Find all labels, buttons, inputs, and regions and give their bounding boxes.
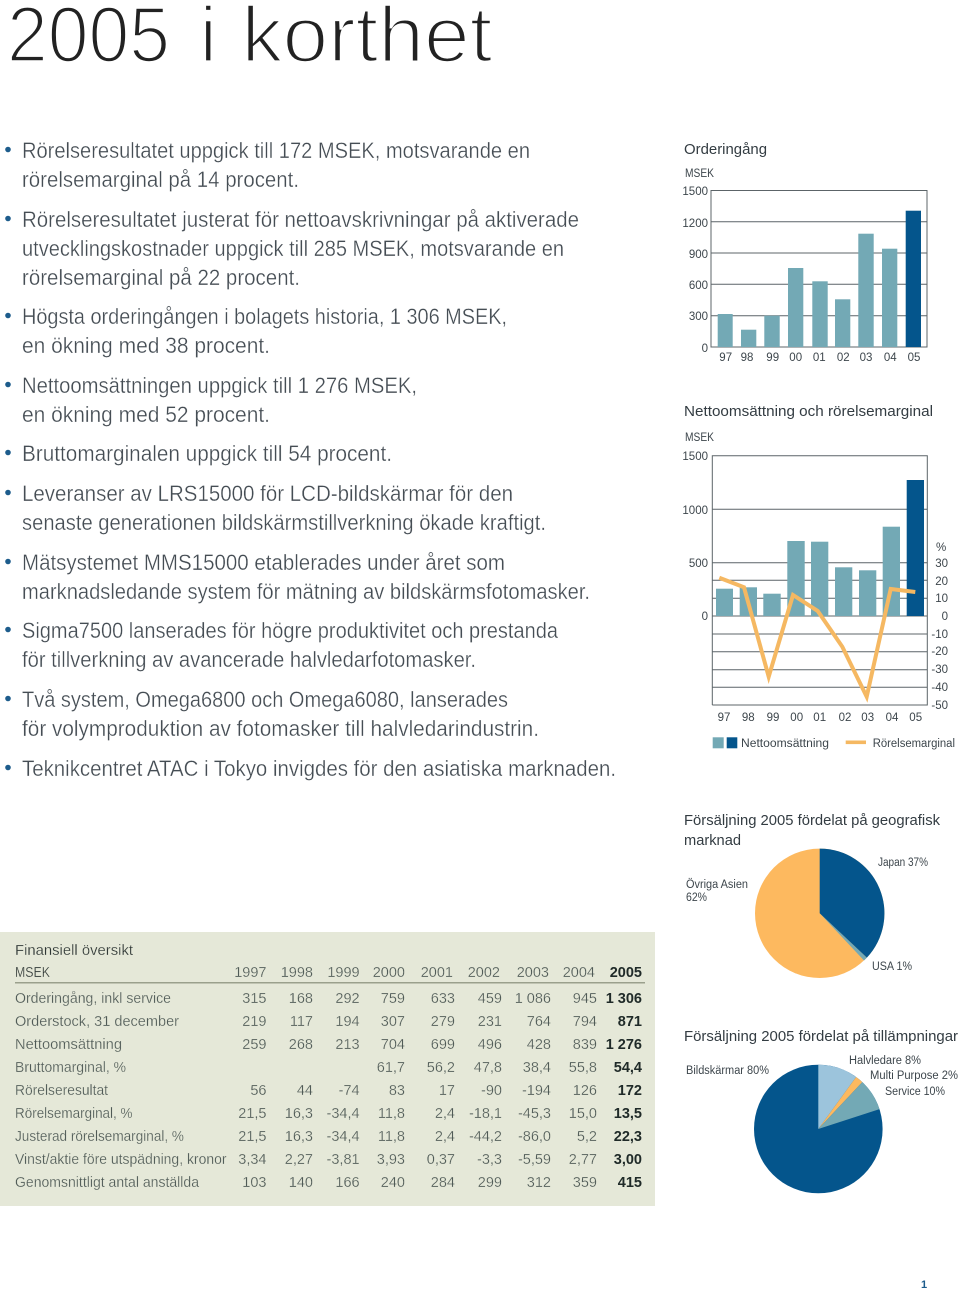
panel: Nettoomsättning och rörelsemarginal chart: -20 <box>931 646 948 658</box>
row: Orderstock: 279 <box>431 1014 455 1030</box>
row: Rörelseresultat: 17 <box>439 1083 455 1099</box>
row: Justerad rörelsemarginal: 11,8 <box>378 1129 405 1145</box>
panel: Orderingång bar chart: 900 <box>689 249 708 261</box>
bullet list: highlights: Teknikcentret ATAC i Tokyo invigdes för den asiatiska marknaden. <box>22 756 616 781</box>
row: Rörelseresultat: 83 <box>389 1083 405 1099</box>
panel: Orderingång bar chart: 300 <box>689 311 708 323</box>
bullet list: highlights: Högsta orderingången i bolagets historia, 1 306 MSEK, <box>22 304 507 329</box>
panel: Orderingång bar chart: 600 <box>689 280 708 292</box>
panel: pie chart geografisk marknad: marknad <box>684 833 741 849</box>
panel: pie chart geografisk marknad: 62% <box>686 892 707 904</box>
row: Justerad rörelsemarginal: Justerad rörelsemarginal, % <box>15 1128 184 1145</box>
panel: pie chart tillämpningar <box>684 1029 958 1193</box>
row: Orderingång: 633 <box>431 991 455 1007</box>
heading: Orderingång: Orderingång <box>684 142 767 158</box>
row: Orderstock: 219 <box>242 1014 266 1030</box>
row: Genomsnittligt antal anställda: 140 <box>289 1175 313 1191</box>
row: Orderstock: 307 <box>381 1014 405 1030</box>
row: Rörelsemarginal: 15,0 <box>569 1106 597 1122</box>
row: Justerad rörelsemarginal: -34,4 <box>327 1129 360 1145</box>
row: Vinst/aktie: 3,93 <box>377 1152 405 1168</box>
row: Rörelseresultat: -90 <box>481 1083 502 1099</box>
row: Orderingång: Orderingång, inkl service <box>15 990 171 1007</box>
row: Nettoomsättning: 1 276 <box>606 1037 642 1053</box>
panel: Nettoomsättning och rörelsemarginal chart: -10 <box>931 629 948 641</box>
legend: Nettoomsättning <box>741 738 829 750</box>
row: Rörelsemarginal: -34,4 <box>327 1106 360 1122</box>
panel: pie chart geografisk marknad: USA 1% <box>872 961 912 973</box>
row: Rörelseresultat: 44 <box>297 1083 313 1099</box>
row: Rörelsemarginal: 16,3 <box>285 1106 313 1122</box>
row: Vinst/aktie: 2,27 <box>285 1152 313 1168</box>
panel: Nettoomsättning och rörelsemarginal chart: 30 <box>935 558 948 570</box>
panel: Nettoomsättning och rörelsemarginal chart: 98 <box>742 712 755 724</box>
panel: Nettoomsättning och rörelsemarginal chart: -30 <box>931 664 948 676</box>
row: Genomsnittligt antal anställda: 359 <box>573 1175 597 1191</box>
panel: Nettoomsättning och rörelsemarginal chart: 97 <box>718 712 730 724</box>
heading: geografisk marknad: Försäljning 2005 fördelat på geografisk <box>684 813 941 829</box>
title <box>7 0 493 78</box>
bullet list: highlights: Leveranser av LRS15000 för LCD-bildskärmar för den <box>22 481 513 506</box>
row: Nettoomsättning: Nettoomsättning <box>15 1036 122 1053</box>
panel: Nettoomsättning och rörelsemarginal chart: 99 <box>767 712 779 724</box>
bullet list: highlights: Sigma7500 lanserades för högre produktivitet och prestanda <box>22 618 559 643</box>
row: Justerad rörelsemarginal: 21,5 <box>238 1129 266 1145</box>
table header row: 1999 <box>327 965 360 981</box>
row: Vinst/aktie: 0,37 <box>427 1152 455 1168</box>
panel: Orderingång bar chart: 97 <box>719 352 732 364</box>
panel: pie chart tillämpningar: Bildskärmar 80% <box>686 1065 769 1077</box>
panel: Nettoomsättning och rörelsemarginal chart: 1000 <box>682 505 708 517</box>
row: Justerad rörelsemarginal: -86,0 <box>518 1129 551 1145</box>
row: Nettoomsättning <box>15 1036 642 1053</box>
panel: Orderingång bar chart: MSEK <box>685 168 714 180</box>
panel: Nettoomsättning och rörelsemarginal chart: MSEK <box>685 432 714 444</box>
row: Vinst/aktie: 2,77 <box>569 1152 597 1168</box>
row: Orderstock: Orderstock, 31 december <box>15 1013 179 1030</box>
row: Orderingång <box>15 990 642 1007</box>
row: Genomsnittligt antal anställda: 240 <box>381 1175 405 1191</box>
row: Rörelseresultat: 172 <box>618 1083 642 1099</box>
panel: Orderingång bar chart: 02 <box>837 352 850 364</box>
row: Bruttomarginal: 54,4 <box>614 1060 642 1076</box>
row: Rörelsemarginal: 2,4 <box>435 1106 455 1122</box>
row: Orderingång: 459 <box>478 991 502 1007</box>
row: Rörelsemarginal: 21,5 <box>238 1106 266 1122</box>
bullet list: highlights: Två system, Omega6800 och Omega6080, lanserades <box>22 687 508 712</box>
row: Orderingång: 292 <box>335 991 360 1007</box>
row: Vinst/aktie: 3,34 <box>238 1152 266 1168</box>
bullet list: highlights: Rörelseresultatet uppgick till 172 MSEK, motsvarande en <box>22 138 530 163</box>
bullet list: highlights: marknadsledande system för mätning av bildskärmsfotomasker. <box>22 579 590 604</box>
legend <box>713 737 955 750</box>
panel: Nettoomsättning och rörelsemarginal chart: 01 <box>813 712 826 724</box>
row: Rörelseresultat: 126 <box>573 1083 597 1099</box>
row: Justerad rörelsemarginal: 2,4 <box>435 1129 455 1145</box>
row: Nettoomsättning: 428 <box>527 1037 551 1053</box>
row: Justerad rörelsemarginal <box>15 1128 642 1145</box>
row: Rörelseresultat: -194 <box>522 1083 551 1099</box>
row: Nettoomsättning: 259 <box>242 1037 266 1053</box>
row: Orderstock: 194 <box>335 1014 360 1030</box>
row: Nettoomsättning: 496 <box>478 1037 502 1053</box>
row: Rörelsemarginal <box>15 1105 642 1122</box>
bullet list: highlights: rörelsemarginal på 14 procent. <box>22 167 299 192</box>
row: Nettoomsättning: 268 <box>289 1037 313 1053</box>
row: Nettoomsättning: 839 <box>573 1037 597 1053</box>
panel: Nettoomsättning och rörelsemarginal chart: 0 <box>942 611 948 623</box>
panel: Orderingång bar chart: 05 <box>908 352 920 364</box>
bullet list: highlights: utvecklingskostnader uppgick till 285 MSEK, motsvarande en <box>22 236 564 261</box>
bullet list: highlights: rörelsemarginal på 22 procent. <box>22 265 300 290</box>
panel: pie chart geografisk marknad: Övriga Asien <box>686 879 748 891</box>
row: Justerad rörelsemarginal: 5,2 <box>577 1129 597 1145</box>
row: Justerad rörelsemarginal: 16,3 <box>285 1129 313 1145</box>
bullet list: highlights: Mätsystemet MMS15000 etablerades under året som <box>22 550 505 575</box>
row: Orderingång: 168 <box>289 991 313 1007</box>
row: Orderingång: 1 086 <box>515 991 551 1007</box>
row: Rörelsemarginal: 11,8 <box>378 1106 405 1122</box>
panel: pie chart geografisk marknad: Japan 37% <box>878 857 928 869</box>
row: Rörelsemarginal: -18,1 <box>469 1106 502 1122</box>
panel: pie chart tillämpningar: Halvledare 8% <box>849 1055 921 1067</box>
row: Genomsnittligt antal anställda: 284 <box>431 1175 455 1191</box>
table header row: 2000 <box>373 965 405 981</box>
row: Nettoomsättning: 704 <box>381 1037 405 1053</box>
panel: pie chart geografisk marknad <box>684 813 941 978</box>
table header row: 2001 <box>421 965 453 981</box>
table header row: 1997 <box>234 965 266 981</box>
row: Vinst/aktie <box>15 1151 642 1168</box>
bullet list: highlights: en ökning med 38 procent. <box>22 333 270 358</box>
row: Orderstock: 117 <box>290 1014 313 1030</box>
row: Genomsnittligt antal anställda: 299 <box>478 1175 502 1191</box>
row: Orderstock: 231 <box>478 1014 502 1030</box>
panel: Nettoomsättning och rörelsemarginal chart: 1500 <box>682 451 708 463</box>
panel: Nettoomsättning och rörelsemarginal chart: -40 <box>931 682 948 694</box>
bullet list: highlights: Nettoomsättningen uppgick till 1 276 MSEK, <box>22 373 417 398</box>
table header row: 2003 <box>517 965 549 981</box>
row: Bruttomarginal: 61,7 <box>377 1060 405 1076</box>
row: Genomsnittligt antal anställda: 166 <box>335 1175 360 1191</box>
row: Rörelseresultat: 56 <box>250 1083 266 1099</box>
row: Rörelsemarginal: -45,3 <box>518 1106 551 1122</box>
table header row: MSEK <box>15 964 50 981</box>
panel: Nettoomsättning och rörelsemarginal chart: -50 <box>931 700 948 712</box>
legend: Rörelsemarginal <box>873 738 955 750</box>
panel: Nettoomsättning och rörelsemarginal chart: 02 <box>839 712 851 724</box>
panel: Orderingång bar chart: 01 <box>813 352 826 364</box>
row: Nettoomsättning: 213 <box>335 1037 360 1053</box>
row: Genomsnittligt antal anställda: 415 <box>618 1175 642 1191</box>
row: Justerad rörelsemarginal: 22,3 <box>614 1129 642 1145</box>
bullet list: highlights: Rörelseresultatet justerat för nettoavskrivningar på aktiverade <box>22 207 579 232</box>
bullet list: highlights: för volymproduktion av fotomasker till halvledarindustrin. <box>22 716 539 741</box>
row: Bruttomarginal <box>15 1059 642 1076</box>
row: Rörelseresultat: Rörelseresultat <box>15 1082 109 1099</box>
bullet list: highlights: senaste generationen bildskärmstillverkning ökade kraftigt. <box>22 510 546 535</box>
panel: Nettoomsättning och rörelsemarginal chart: 00 <box>790 712 803 724</box>
panel: Orderingång bar chart: 99 <box>766 352 779 364</box>
row: Rörelseresultat <box>15 1082 642 1099</box>
panel: Nettoomsättning och rörelsemarginal chart: 10 <box>935 593 948 605</box>
panel: Nettoomsättning och rörelsemarginal chart: 03 <box>861 712 874 724</box>
page number: 1 <box>921 1279 927 1291</box>
table header row: 1998 <box>281 965 313 981</box>
panel: Orderingång bar chart: 1200 <box>682 218 708 230</box>
panel: pie chart tillämpningar: Multi Purpose 2% <box>870 1070 958 1082</box>
bullet list: highlights <box>5 138 616 781</box>
row: Genomsnittligt antal anställda <box>15 1174 642 1191</box>
row: Bruttomarginal: 55,8 <box>569 1060 597 1076</box>
row: Vinst/aktie: -5,59 <box>518 1152 551 1168</box>
row: Orderstock: 794 <box>573 1014 597 1030</box>
row: Rörelsemarginal: 13,5 <box>614 1106 642 1122</box>
panel: Nettoomsättning och rörelsemarginal chart: 0 <box>702 611 708 623</box>
row: Bruttomarginal: 47,8 <box>474 1060 502 1076</box>
row: Orderingång: 945 <box>573 991 597 1007</box>
row: Orderstock: 871 <box>618 1014 642 1030</box>
table header row: 2004 <box>563 965 595 981</box>
bullet list: highlights: Bruttomarginalen uppgick till 54 procent. <box>22 441 392 466</box>
table header row: 2005 <box>610 965 642 981</box>
panel: pie chart tillämpningar: Service 10% <box>885 1086 945 1098</box>
row: Bruttomarginal: 56,2 <box>427 1060 455 1076</box>
row: Orderstock <box>15 1013 642 1030</box>
heading: tillämpningar: Försäljning 2005 fördelat på tillämpningar <box>684 1029 958 1045</box>
table heading: Finansiell översikt <box>15 942 134 959</box>
row: Vinst/aktie: 3,00 <box>614 1152 642 1168</box>
table header row: 2002 <box>468 965 500 981</box>
row: Vinst/aktie: Vinst/aktie före utspädning, kronor <box>15 1151 227 1168</box>
row: Genomsnittligt antal anställda: 312 <box>527 1175 551 1191</box>
row: Genomsnittligt antal anställda: 103 <box>242 1175 266 1191</box>
panel: Orderingång bar chart: 0 <box>702 343 708 355</box>
table header row <box>15 964 642 981</box>
panel: Nettoomsättning och rörelsemarginal chart: 05 <box>909 712 922 724</box>
panel: Orderingång bar chart: 00 <box>789 352 802 364</box>
heading: Nettoomsättning och rörelsemarginal: Nettoomsättning och rörelsemarginal <box>684 404 933 420</box>
panel: Nettoomsättning och rörelsemarginal chart <box>682 404 955 750</box>
row: Vinst/aktie: -3,3 <box>477 1152 502 1168</box>
panel: Nettoomsättning och rörelsemarginal chart: % <box>936 542 946 554</box>
bullet list: highlights: för tillverkning av avancerade halvledarfotomasker. <box>22 647 476 672</box>
panel: Orderingång bar chart <box>682 142 927 364</box>
panel: Orderingång bar chart: 1500 <box>682 186 708 198</box>
panel: Orderingång bar chart: 03 <box>860 352 872 364</box>
row: Bruttomarginal: Bruttomarginal, % <box>15 1059 126 1076</box>
panel: Orderingång bar chart: 98 <box>741 352 753 364</box>
panel: Nettoomsättning och rörelsemarginal chart: 500 <box>689 558 708 570</box>
row: Orderingång: 759 <box>381 991 405 1007</box>
row: Justerad rörelsemarginal: -44,2 <box>469 1129 502 1145</box>
row: Vinst/aktie: -3,81 <box>327 1152 360 1168</box>
row: Nettoomsättning: 699 <box>431 1037 455 1053</box>
row: Orderingång: 1 306 <box>606 991 642 1007</box>
panel: Orderingång bar chart: 04 <box>884 352 897 364</box>
panel: Nettoomsättning och rörelsemarginal chart: 04 <box>886 712 899 724</box>
panel: Nettoomsättning och rörelsemarginal chart: 20 <box>935 576 948 588</box>
row: Orderingång: 315 <box>242 991 266 1007</box>
row: Rörelsemarginal: Rörelsemarginal, % <box>15 1105 132 1122</box>
row: Genomsnittligt antal anställda: Genomsnittligt antal anställda <box>15 1174 200 1191</box>
bullet list: highlights: en ökning med 52 procent. <box>22 402 270 427</box>
row: Rörelseresultat: -74 <box>339 1083 360 1099</box>
row: Bruttomarginal: 38,4 <box>523 1060 551 1076</box>
row: Orderstock: 764 <box>527 1014 551 1030</box>
panel: Finansiell översikt table <box>0 932 655 1206</box>
